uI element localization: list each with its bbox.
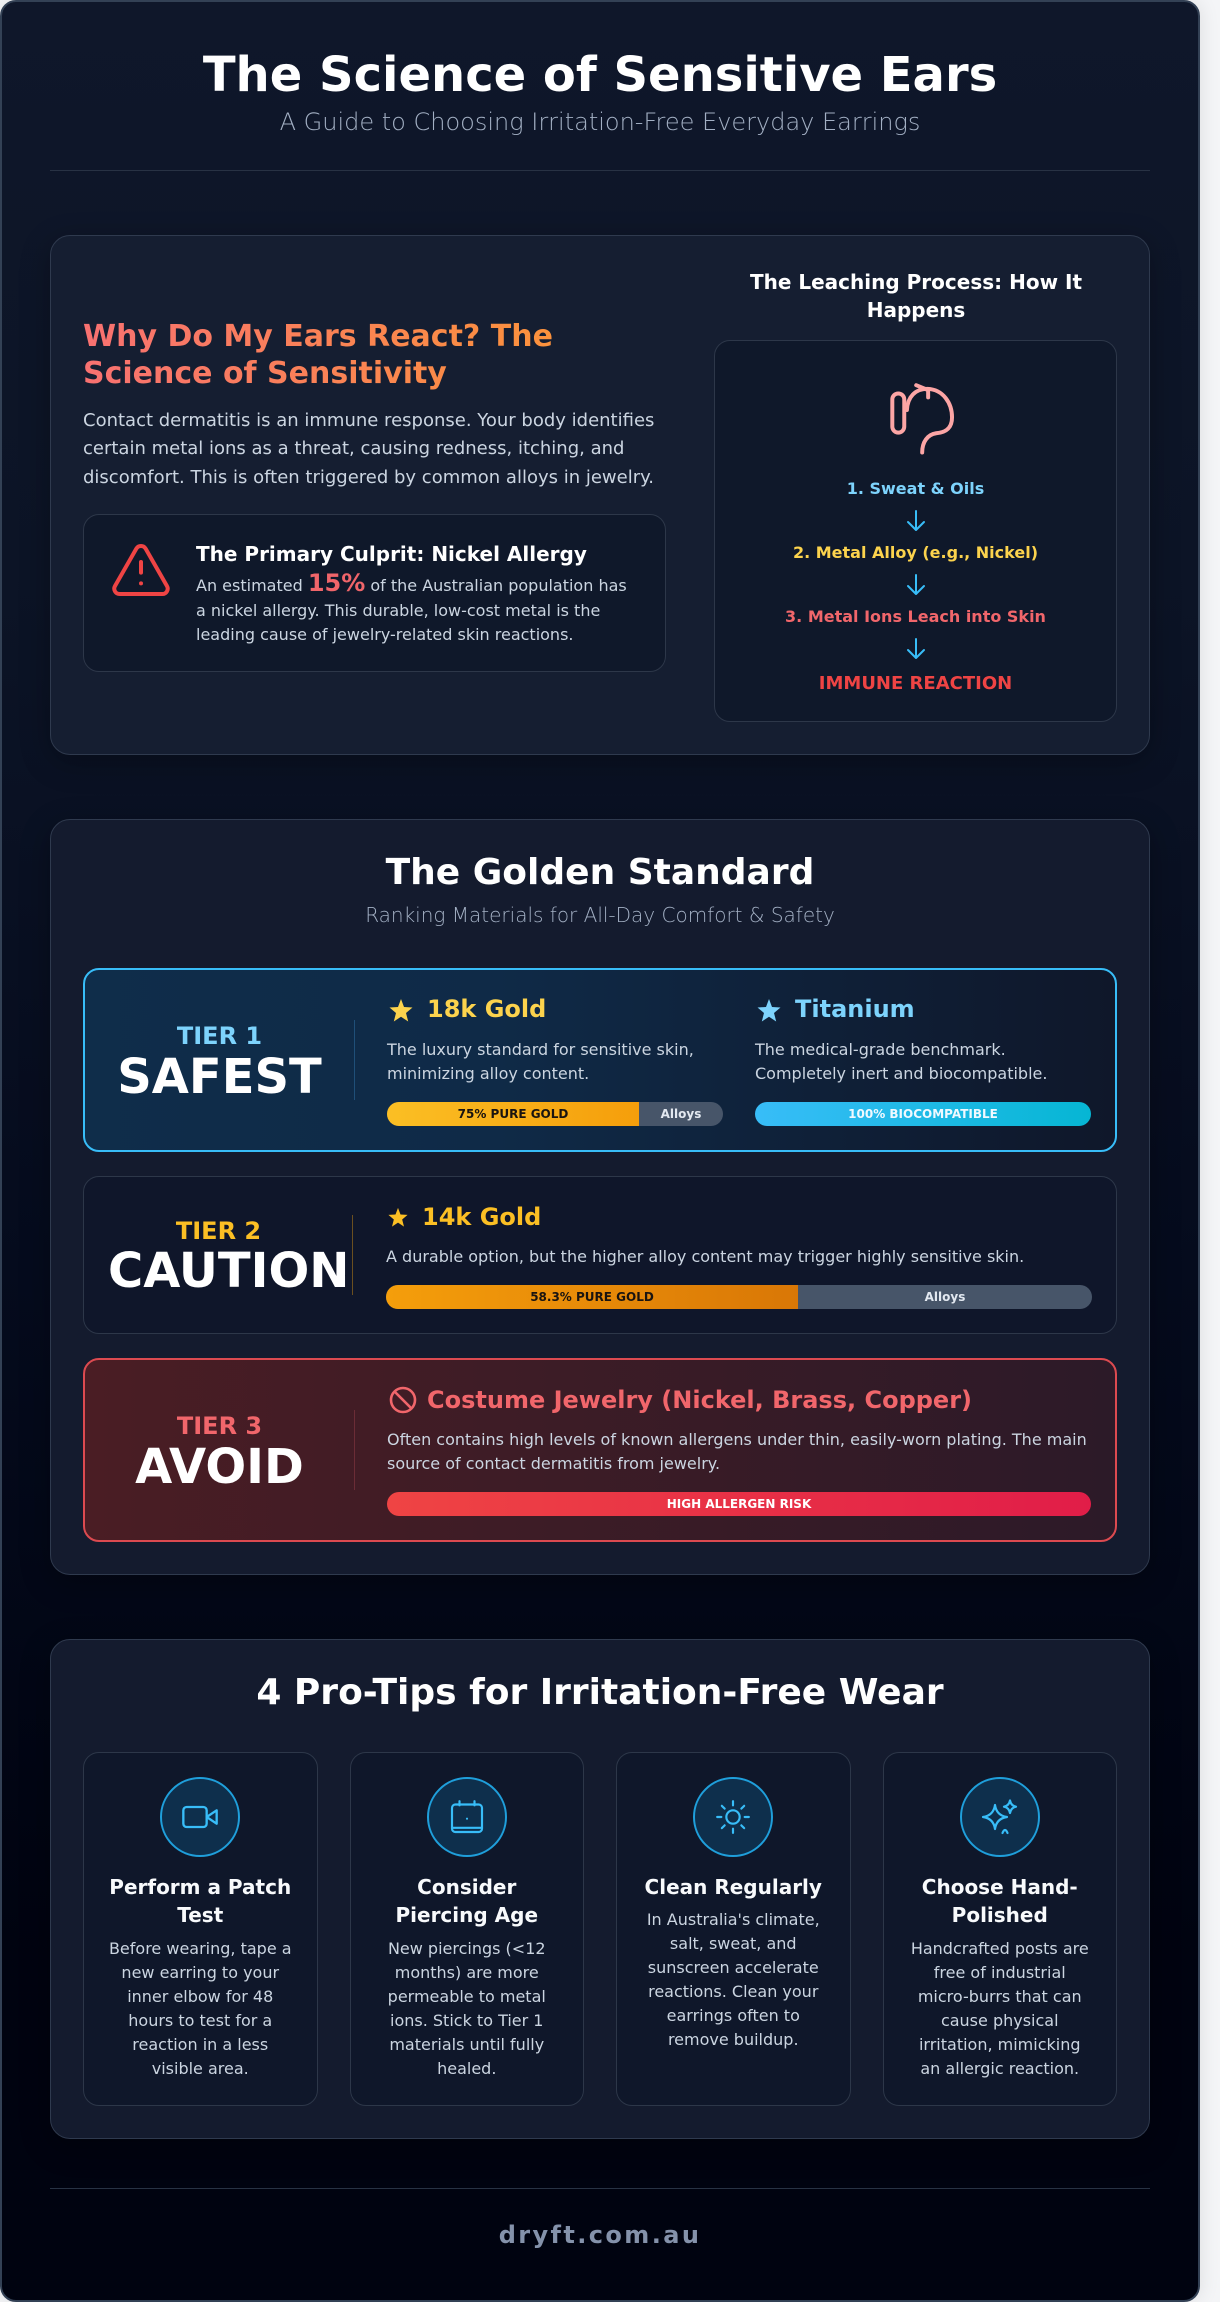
icon: sparkles	[960, 1777, 1040, 1857]
tier 3 card	[83, 1358, 1117, 1542]
footer brand: dryft.com.au	[499, 2221, 701, 2249]
tier 1 rating: SAFEST	[117, 1049, 322, 1105]
tip 4 text	[911, 1939, 1089, 2078]
intro text: certain metal ions as a threat, causing redness, itching, and	[83, 438, 624, 459]
tip 1 text: new earring to your	[121, 1963, 279, 1982]
tip 3 text: sunscreen accelerate	[648, 1958, 819, 1977]
titanium heading: Titanium	[795, 995, 915, 1023]
14k gold heading: 14k Gold	[422, 1203, 541, 1231]
tip 2 text: permeable to metal	[388, 1987, 546, 2006]
callout heading: The Primary Culprit: Nickel Allergy	[196, 542, 587, 566]
arrow 1	[907, 510, 925, 531]
icon: ban	[390, 1386, 416, 1414]
tip 2 title	[395, 1875, 538, 1927]
tip 1 text: visible area.	[152, 2059, 249, 2078]
tip card 2	[350, 1752, 584, 2106]
costume jewelry heading: Costume Jewelry (Nickel, Brass, Copper)	[427, 1386, 972, 1414]
tip 3 text: salt, sweat, and	[670, 1934, 797, 1953]
tier 2 card	[83, 1176, 1117, 1334]
tier 2 label: TIER 2	[176, 1217, 261, 1245]
tip 1 text: Before wearing, tape a	[109, 1939, 292, 1958]
14k gold bar: 58.3% PURE GOLD	[530, 1290, 654, 1304]
heading: leaching process	[750, 270, 1082, 322]
intro text: Contact dermatitis is an immune response. Your body identifies	[83, 410, 654, 430]
step 2: 2. Metal Alloy (e.g., Nickel)	[793, 543, 1038, 562]
14k gold bar: Alloys	[925, 1290, 965, 1304]
tip 4 text: an allergic reaction.	[920, 2059, 1079, 2078]
arrow 3	[907, 638, 925, 659]
costume jewelry text	[387, 1430, 1087, 1473]
heading: leaching process: Happens	[867, 298, 965, 322]
tier 1 card	[83, 968, 1117, 1152]
tip card 1	[83, 1752, 318, 2106]
icon: ear	[890, 383, 954, 454]
intro text: discomfort. This is often triggered by common alloys in jewelry.	[83, 466, 654, 488]
titanium text: Completely inert and biocompatible.	[755, 1064, 1047, 1083]
titanium text	[754, 1040, 1047, 1083]
tip 1 text: hours to test for a	[128, 2011, 272, 2030]
arrow 2	[907, 574, 925, 595]
icon: sun	[693, 1777, 773, 1857]
callout text	[196, 569, 627, 644]
callout text: An estimated 15% of the Australian population has	[196, 569, 627, 597]
titanium text: The medical-grade benchmark.	[755, 1040, 1006, 1059]
tip 2 text: New piercings (<12	[388, 1939, 546, 1958]
tier 2 rating: CAUTION	[108, 1243, 349, 1299]
tip 4 text: Handcrafted posts are	[911, 1939, 1089, 1958]
tip card 4	[882, 1752, 1117, 2106]
tip 3 text	[647, 1910, 820, 2049]
tip 2 text: healed.	[437, 2059, 496, 2078]
tip 4 title: Polished	[952, 1903, 1048, 1927]
tip 3 text: remove buildup.	[668, 2030, 799, 2049]
heading: why do my ears react: Why Do My Ears React? The	[83, 319, 553, 354]
risk bar	[387, 1492, 1091, 1516]
callout text: leading cause of jewelry-related skin reactions.	[196, 625, 574, 644]
tip 2 title: Consider	[417, 1875, 516, 1899]
icon: calendar	[427, 1777, 507, 1857]
panel: the golden standard	[50, 819, 1150, 1575]
18k gold text: The luxury standard for sensitive skin,	[387, 1040, 694, 1059]
callout: nickel allergy	[83, 514, 666, 672]
titanium bar	[755, 1102, 1091, 1126]
tip 2 text	[388, 1939, 546, 2078]
subtitle: A Guide to Choosing Irritation-Free Everyday Earrings	[280, 108, 920, 136]
18k gold bar	[387, 1102, 723, 1126]
tip 4 title: Choose Hand-	[922, 1875, 1078, 1899]
step 1: 1. Sweat & Oils	[847, 479, 984, 498]
step 3: 3. Metal Ions Leach into Skin	[785, 607, 1046, 626]
tip 2 text: months) are more	[395, 1963, 539, 1982]
risk bar: HIGH ALLERGEN RISK	[667, 1497, 811, 1511]
18k gold bar: Alloys	[661, 1107, 701, 1121]
icon: warning triangle	[112, 544, 170, 596]
costume jewelry text: source of contact dermatitis from jewelry.	[387, 1454, 720, 1473]
tier 3 label: TIER 3	[177, 1412, 262, 1440]
panel: why ears react	[50, 235, 1150, 755]
14k gold bar	[386, 1285, 1092, 1309]
final reaction: IMMUNE REACTION	[819, 673, 1012, 694]
tip 1 text: reaction in a less	[132, 2035, 268, 2054]
tip 2 text: materials until fully	[389, 2035, 544, 2054]
heading: why do my ears react: Science of Sensitivity	[83, 356, 447, 391]
icon: video	[160, 1777, 240, 1857]
tip 4 text: irritation, mimicking	[919, 2035, 1081, 2054]
title: The Science of Sensitive Ears	[203, 47, 997, 103]
tip 4 text: cause physical	[941, 2011, 1059, 2030]
intro text	[83, 410, 654, 488]
subheading: Ranking Materials for All-Day Comfort & Safety	[365, 903, 835, 927]
heading: pro tips: 4 Pro-Tips for Irritation-Free Wear	[256, 1672, 944, 1713]
tip 3 text: reactions. Clean your	[648, 1982, 818, 2001]
tip 3 title: Clean Regularly	[645, 1875, 822, 1899]
tip 1 title	[109, 1875, 291, 1927]
tip 3 text: earrings often to	[667, 2006, 800, 2025]
panel: pro tips	[50, 1639, 1150, 2139]
tip 1 text: inner elbow for 48	[127, 1987, 273, 2006]
tip card 3	[616, 1752, 850, 2106]
18k gold heading: 18k Gold	[427, 995, 546, 1023]
tip 4 title	[922, 1875, 1078, 1927]
tip 2 title: Piercing Age	[395, 1903, 538, 1927]
14k gold text: A durable option, but the higher alloy content may trigger highly sensitive skin.	[386, 1247, 1024, 1266]
tip 1 text	[109, 1939, 292, 2078]
tip 4 text: micro-burrs that can	[918, 1987, 1082, 2006]
heading: leaching process: The Leaching Process: How It	[750, 270, 1082, 294]
icon: star	[388, 1208, 408, 1227]
panel: leaching process flow	[714, 340, 1117, 722]
titanium bar: 100% BIOCOMPATIBLE	[848, 1107, 998, 1121]
18k gold text: minimizing alloy content.	[387, 1064, 589, 1083]
18k gold text	[386, 1040, 694, 1083]
icon: titanium star	[758, 999, 780, 1022]
tip 1 title: Perform a Patch	[109, 1875, 291, 1899]
icon: gold star	[390, 999, 412, 1022]
tip 3 text: In Australia's climate,	[647, 1910, 820, 1929]
18k gold bar: 75% PURE GOLD	[458, 1107, 568, 1121]
heading: golden standard: The Golden Standard	[386, 852, 814, 893]
tier 1 label: TIER 1	[177, 1022, 262, 1050]
heading: why do my ears react	[83, 318, 553, 392]
tip 2 text: ions. Stick to Tier 1	[390, 2011, 543, 2030]
callout text: a nickel allergy. This durable, low-cost metal is the	[196, 600, 600, 620]
tip 1 title: Test	[177, 1903, 223, 1927]
tier 3 rating: AVOID	[135, 1439, 304, 1495]
tip 4 text: free of industrial	[934, 1963, 1066, 1982]
costume jewelry text: Often contains high levels of known allergens under thin, easily-worn plating. The main	[387, 1430, 1087, 1449]
